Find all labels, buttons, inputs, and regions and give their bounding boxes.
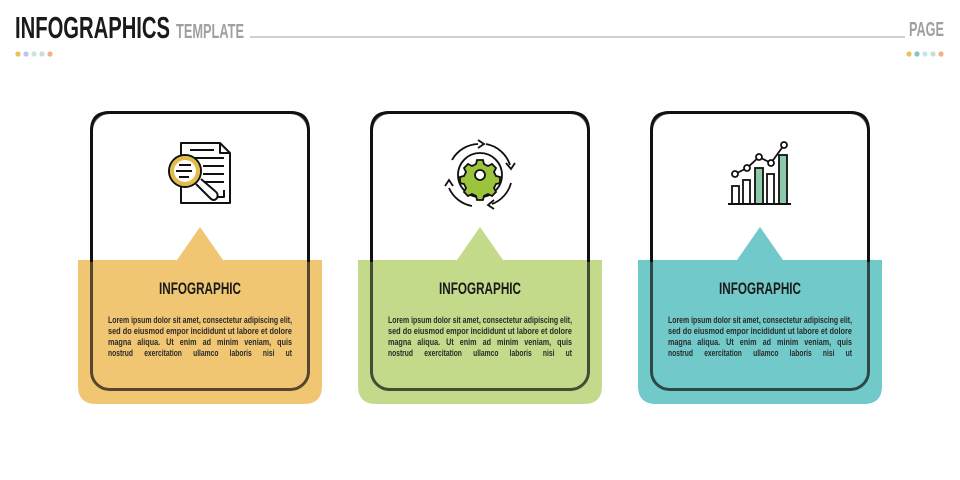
body text: sed do eiusmod empor incididunt ut labore et dolore xyxy=(108,326,292,337)
header xyxy=(15,10,944,57)
icon: gear cycle xyxy=(445,140,515,209)
colored fill with pointer xyxy=(78,227,322,404)
body text: magna aliqua. Ut enim ad minim veniam, quis xyxy=(668,337,852,348)
title: INFOGRAPHICS xyxy=(15,10,170,45)
body text xyxy=(668,315,853,359)
body text: Lorem ipsum dolor sit amet, consectetur adipiscing elit, xyxy=(668,315,852,326)
icon: growth chart xyxy=(728,142,791,204)
body text: Lorem ipsum dolor sit amet, consectetur adipiscing elit, xyxy=(108,315,292,326)
colored fill with pointer xyxy=(358,227,602,404)
body text xyxy=(388,315,573,359)
body text: magna aliqua. Ut enim ad minim veniam, quis xyxy=(108,337,292,348)
body text: nostrud exercitation ullamco laboris nisi ut xyxy=(108,348,293,359)
body text: Lorem ipsum dolor sit amet, consectetur adipiscing elit, xyxy=(388,315,572,326)
panel: card 1 xyxy=(78,112,322,404)
body text xyxy=(108,315,293,359)
body text: magna aliqua. Ut enim ad minim veniam, quis xyxy=(388,337,572,348)
panel: card 2 xyxy=(358,112,602,404)
body text: sed do eiusmod empor incididunt ut labore et dolore xyxy=(388,326,572,337)
body text: nostrud exercitation ullamco laboris nisi ut xyxy=(668,348,853,359)
dots right xyxy=(906,51,944,57)
colored fill with pointer xyxy=(638,227,882,404)
subtitle: TEMPLATE xyxy=(176,21,244,43)
panel: card 3 xyxy=(638,112,882,404)
heading: INFOGRAPHIC xyxy=(159,279,241,298)
heading: INFOGRAPHIC xyxy=(439,279,521,298)
heading: INFOGRAPHIC xyxy=(719,279,801,298)
icon: document search xyxy=(169,143,230,203)
body text: nostrud exercitation ullamco laboris nisi ut xyxy=(388,348,573,359)
dots left xyxy=(15,51,53,57)
body text: sed do eiusmod empor incididunt ut labore et dolore xyxy=(668,326,852,337)
